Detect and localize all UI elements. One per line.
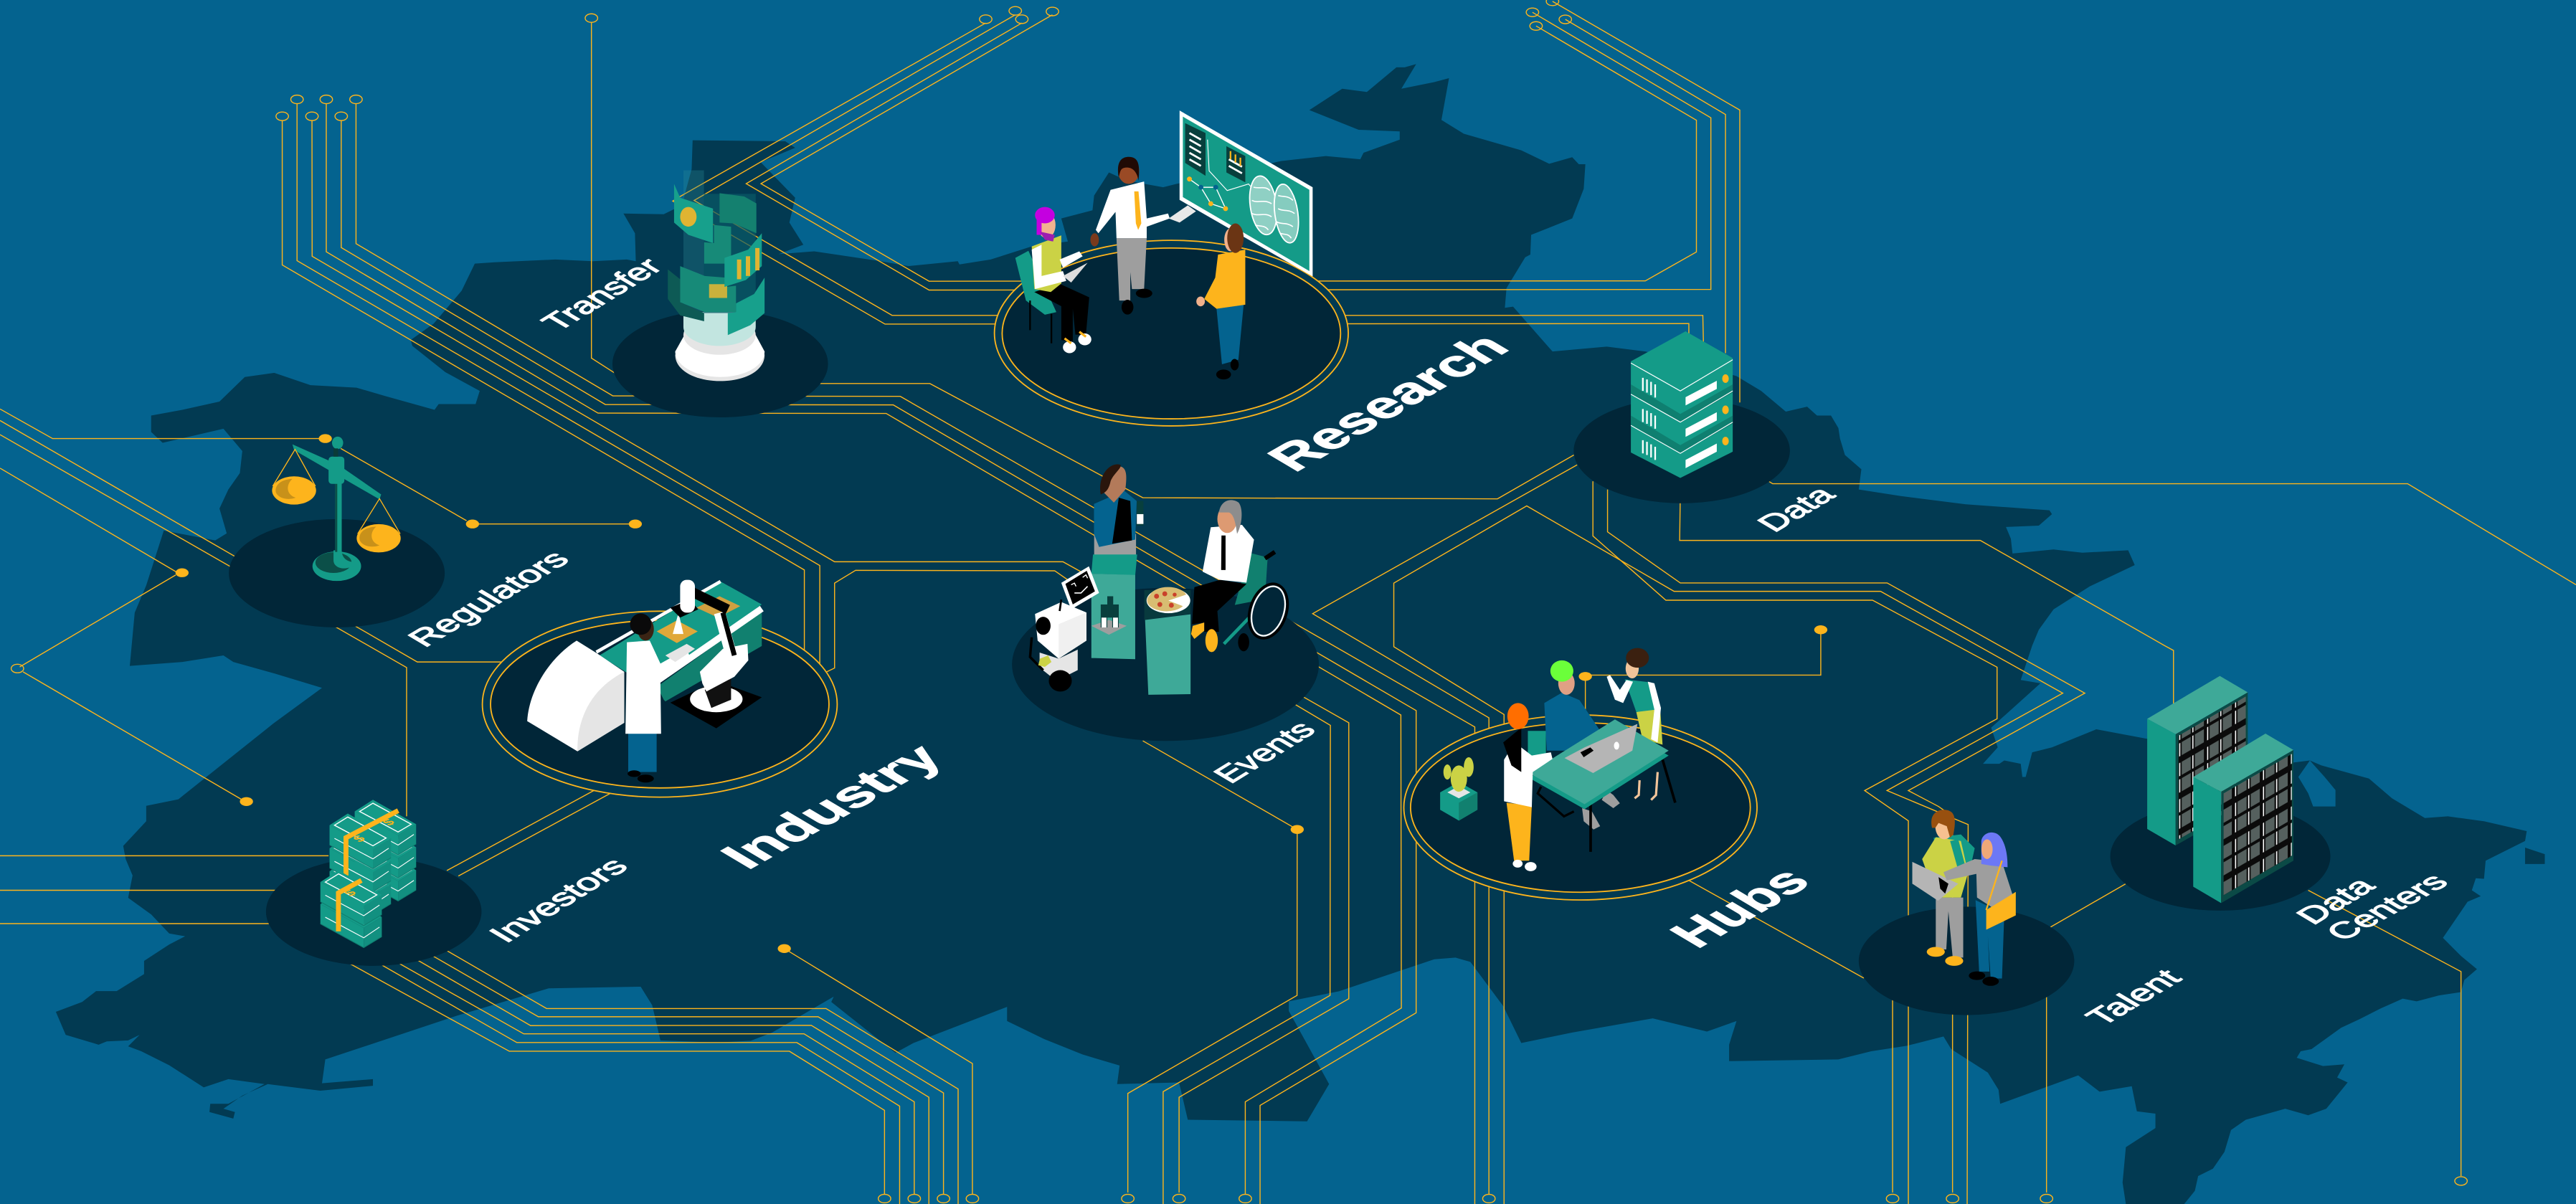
heading: Hubs: Hubs (1658, 860, 1822, 955)
label: Data Centers: Data (2289, 873, 2382, 929)
icon: data server stack (1631, 331, 1733, 478)
platform: investors (266, 858, 481, 966)
icon: data center racks (2147, 676, 2293, 903)
platform: data centers (2111, 802, 2331, 911)
label: Data Centers: Centers (2319, 869, 2456, 945)
platform: data (1573, 398, 1790, 503)
label: Events: Events (1206, 716, 1323, 788)
heading: Industry: Industry (709, 736, 955, 876)
icon: scales (272, 437, 401, 581)
icon: cash stacks: $ (379, 817, 398, 828)
icon: cash stacks: $ (340, 887, 359, 899)
platform: talent (1859, 906, 2074, 1015)
label: Talent: Talent (2079, 964, 2189, 1030)
label: Data: Data (1751, 482, 1843, 536)
platform: events (1012, 588, 1319, 741)
icon: talent (1913, 810, 2016, 986)
platform: regulators (229, 519, 445, 627)
platform ring: industry (483, 611, 837, 797)
heading: Research: Research (1256, 326, 1521, 479)
label: Transfer: Transfer (534, 253, 670, 336)
icon: cash stacks: $ (349, 833, 369, 844)
icon: industry robot and scientist (527, 580, 762, 782)
label: Regulators: Regulators (401, 546, 577, 652)
icon: events (1030, 465, 1294, 695)
platform: transfer (612, 311, 828, 417)
icon: research team and brain screen (1015, 110, 1312, 379)
icon: cash stacks (321, 800, 416, 947)
inlet (2298, 761, 2336, 807)
platform ring: research (995, 240, 1348, 426)
platform ring: hubs (1404, 715, 1757, 900)
terminal dots (176, 434, 1827, 953)
icon: transfer tower (668, 171, 764, 381)
label: Investors: Investors (482, 853, 635, 947)
icon: hubs meeting (1440, 648, 1675, 871)
